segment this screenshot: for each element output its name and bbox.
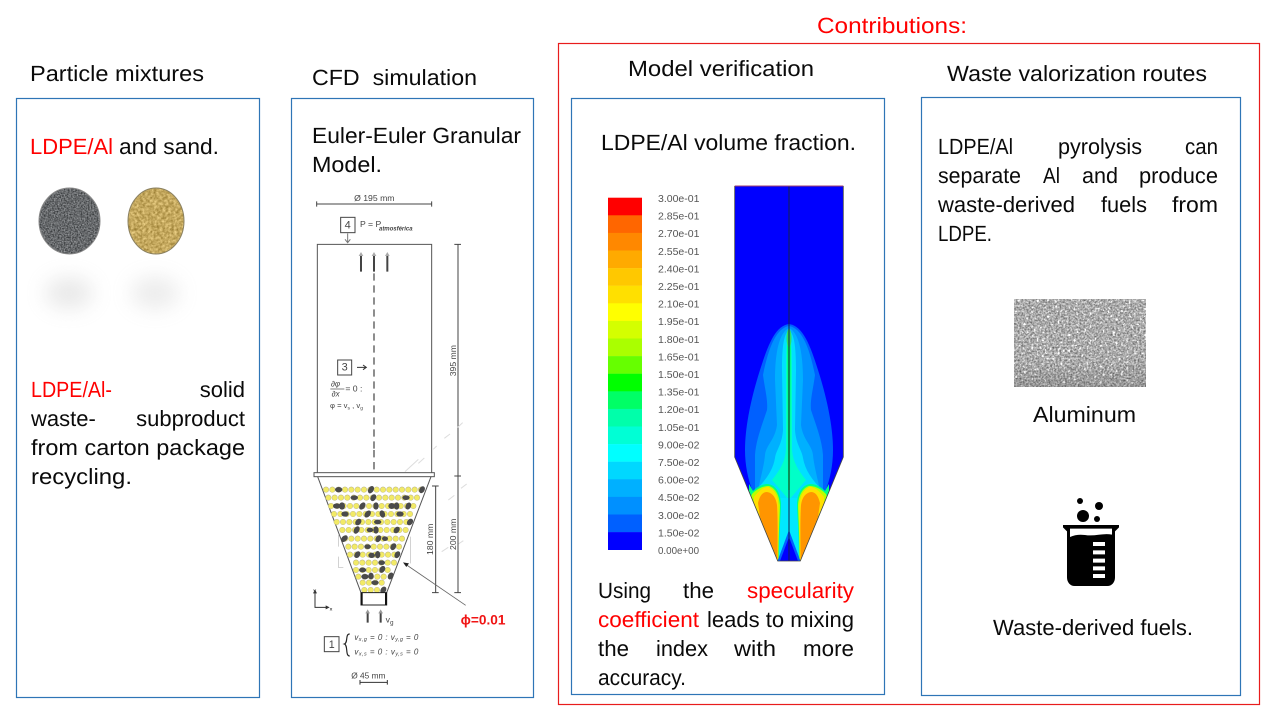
legend: colour scale: 2.85e-01 <box>658 211 700 223</box>
diagram: reactor cone with particle bed: y,g <box>394 637 403 643</box>
diagram: reactor cone with particle bed: = 0 <box>403 648 419 657</box>
reflection: sand sample <box>131 277 179 309</box>
diagram: reactor cone with particle bed: Y <box>313 589 317 595</box>
diagram: reactor upper section: , v <box>350 401 360 410</box>
heading: contributions: Contributions: <box>817 13 967 38</box>
reflection: LDPE/Al sample <box>45 277 93 309</box>
text: specularity coefficient finding: coefficient <box>598 607 699 632</box>
contour: right half <box>790 186 843 561</box>
text: pyrolysis description: Al <box>1043 163 1060 188</box>
text: pyrolysis description: waste-derived <box>937 192 1075 217</box>
icon: beaker with bubbles <box>1063 498 1119 586</box>
diagram: reactor upper section: s <box>348 405 351 411</box>
diagram: reactor upper section: φ = v <box>330 401 348 410</box>
icon: sand sample <box>128 188 184 254</box>
particles: LDPE/Al <box>333 485 426 595</box>
heading: waste valorization routes: Waste valorization routes <box>947 61 1207 86</box>
text: pyrolysis description: LDPE/Al <box>938 134 1013 159</box>
text: LDPE/Al description: LDPE/Al- <box>31 377 112 402</box>
diagram: reactor upper section: 395 mm <box>448 345 458 376</box>
image: aluminum texture <box>1014 299 1146 387</box>
text: pyrolysis description <box>937 134 1218 246</box>
text: LDPE/Al and sand <box>30 134 219 159</box>
legend: colour scale: 1.05e-01 <box>658 422 700 434</box>
text: pyrolysis description: separate <box>938 163 1021 188</box>
legend: colour scale: 0.00e+00 <box>658 545 699 557</box>
particles: sand <box>326 490 422 590</box>
diagram: reactor upper section: 3 <box>342 362 348 374</box>
legend: colour scale: 1.50e-01 <box>658 369 700 381</box>
legend: colour scale: 4.50e-02 <box>658 492 700 504</box>
panel: waste valorization routes <box>922 98 1240 696</box>
chart: LDPE/Al volume fraction contour <box>730 186 848 562</box>
diagram: reactor cone with particle bed: = 0 : v <box>367 633 396 642</box>
legend: colour scale: 2.10e-01 <box>658 299 700 311</box>
text: pyrolysis description: pyrolysis <box>1058 134 1142 159</box>
legend: colour scale: 1.95e-01 <box>658 316 700 328</box>
diagram: reactor upper section <box>317 193 463 450</box>
text: specularity coefficient finding: more <box>803 636 854 661</box>
diagram: reactor cone with particle bed: 200 mm <box>448 519 458 550</box>
heading: model verification: Model verification <box>628 56 814 81</box>
diagram: reactor cone with particle bed: y,s <box>394 652 403 658</box>
legend: colour scale: 2.70e-01 <box>658 228 700 240</box>
text: pyrolysis description: produce <box>1139 163 1218 188</box>
text: LDPE/Al description: from carton package <box>31 435 245 460</box>
text: pyrolysis description: can <box>1185 134 1218 159</box>
diagram: reactor cone with particle bed: x,s <box>358 652 367 658</box>
contour: left half <box>735 186 788 561</box>
heading: CFD simulation: CFD simulation <box>312 65 477 90</box>
text: specularity coefficient finding: index <box>656 636 708 661</box>
diagram: reactor cone with particle bed: x <box>330 607 333 613</box>
panel: contributions outline <box>558 44 1260 704</box>
legend: colour scale: 6.00e-02 <box>658 475 700 487</box>
legend: colour scale: 9.00e-02 <box>658 439 700 451</box>
diagram: reactor upper section: atmosférica <box>379 226 413 232</box>
heading: particle mixtures: Particle mixtures <box>30 61 204 86</box>
text: LDPE/Al and sand: and sand. <box>119 134 219 159</box>
legend: colour scale: 7.50e-02 <box>658 457 700 469</box>
text: specularity coefficient finding: with <box>733 636 776 661</box>
diagram: reactor cone with particle bed: = 0 : v <box>367 648 396 657</box>
text: LDPE/Al and sand: LDPE/Al <box>30 134 113 159</box>
text: LDPE/Al description: recycling. <box>31 464 132 489</box>
legend: colour scale <box>608 193 700 557</box>
diagram: reactor cone with particle bed: v <box>354 648 358 657</box>
legend: colour scale: 1.65e-01 <box>658 351 700 363</box>
diagram: reactor cone with particle bed: 180 mm <box>425 524 435 555</box>
text: pyrolysis description: LDPE. <box>938 221 992 246</box>
text: LDPE/Al description <box>30 377 245 489</box>
diagram: reactor upper section: ∂φ <box>331 380 340 389</box>
text: model name <box>312 123 521 177</box>
diagram: reactor upper section: 4 <box>345 219 351 231</box>
diagram: reactor upper section: P = P <box>360 219 381 229</box>
text: LDPE/Al description: solid <box>200 377 245 402</box>
text: specularity coefficient finding: Using <box>598 578 651 603</box>
text: pyrolysis description: fuels <box>1101 192 1147 217</box>
text: LDPE/Al description: waste- <box>30 406 96 431</box>
label: waste-derived fuels: Waste-derived fuels. <box>993 615 1193 640</box>
diagram: reactor cone with particle bed: ϕ=0.01 <box>461 613 506 628</box>
diagram: reactor upper section: = 0 : <box>345 384 362 394</box>
text: volume fraction title: LDPE/Al volume fraction. <box>601 130 856 155</box>
text: LDPE/Al description: subproduct <box>136 406 245 431</box>
diagram: reactor cone with particle bed: = 0 <box>403 633 419 642</box>
diagram: reactor upper section: ∂x <box>332 390 341 399</box>
text: pyrolysis description: and <box>1082 163 1118 188</box>
label: aluminum: Aluminum <box>1033 402 1136 427</box>
panel: particle mixtures <box>16 98 260 698</box>
legend: colour scale: 3.00e-02 <box>658 510 700 522</box>
diagram: reactor cone with particle bed: Ø 45 mm <box>351 671 386 681</box>
diagram: reactor cone with particle bed: 1 <box>329 639 335 651</box>
legend: colour scale: 2.40e-01 <box>658 263 700 275</box>
diagram: reactor cone with particle bed: v <box>354 633 358 642</box>
diagram: reactor cone with particle bed: x,g <box>358 637 367 643</box>
text: model name: Model. <box>312 152 382 177</box>
text: specularity coefficient finding: specularity <box>747 578 854 603</box>
text: specularity coefficient finding: the <box>598 636 629 661</box>
legend: colour scale: 2.25e-01 <box>658 281 700 293</box>
panel: CFD simulation <box>292 98 534 698</box>
icon: LDPE/Al sample <box>39 188 100 254</box>
legend: colour scale: 1.20e-01 <box>658 404 700 416</box>
diagram: reactor cone with particle bed: g <box>390 619 394 626</box>
panel: model verification <box>572 98 884 694</box>
text: specularity coefficient finding: the <box>683 578 714 603</box>
legend: colour scale: 1.35e-01 <box>658 387 700 399</box>
text: specularity coefficient finding <box>598 578 854 690</box>
diagram: reactor upper section: g <box>360 405 363 411</box>
text: pyrolysis description: from <box>1172 192 1218 217</box>
legend: colour scale: 3.00e-01 <box>658 193 700 205</box>
diagram: reactor upper section: Ø 195 mm <box>354 193 395 203</box>
diagram: reactor cone with particle bed: v <box>386 615 390 625</box>
legend: colour scale: 1.80e-01 <box>658 334 700 346</box>
text: specularity coefficient finding: accuracy. <box>598 665 686 690</box>
text: model name: Euler-Euler Granular <box>312 123 521 148</box>
legend: colour scale: 2.55e-01 <box>658 246 700 258</box>
legend: colour scale: 1.50e-02 <box>658 527 700 539</box>
diagram: reactor cone with particle bed <box>313 450 506 685</box>
text: specularity coefficient finding: leads to mixing <box>707 607 854 632</box>
